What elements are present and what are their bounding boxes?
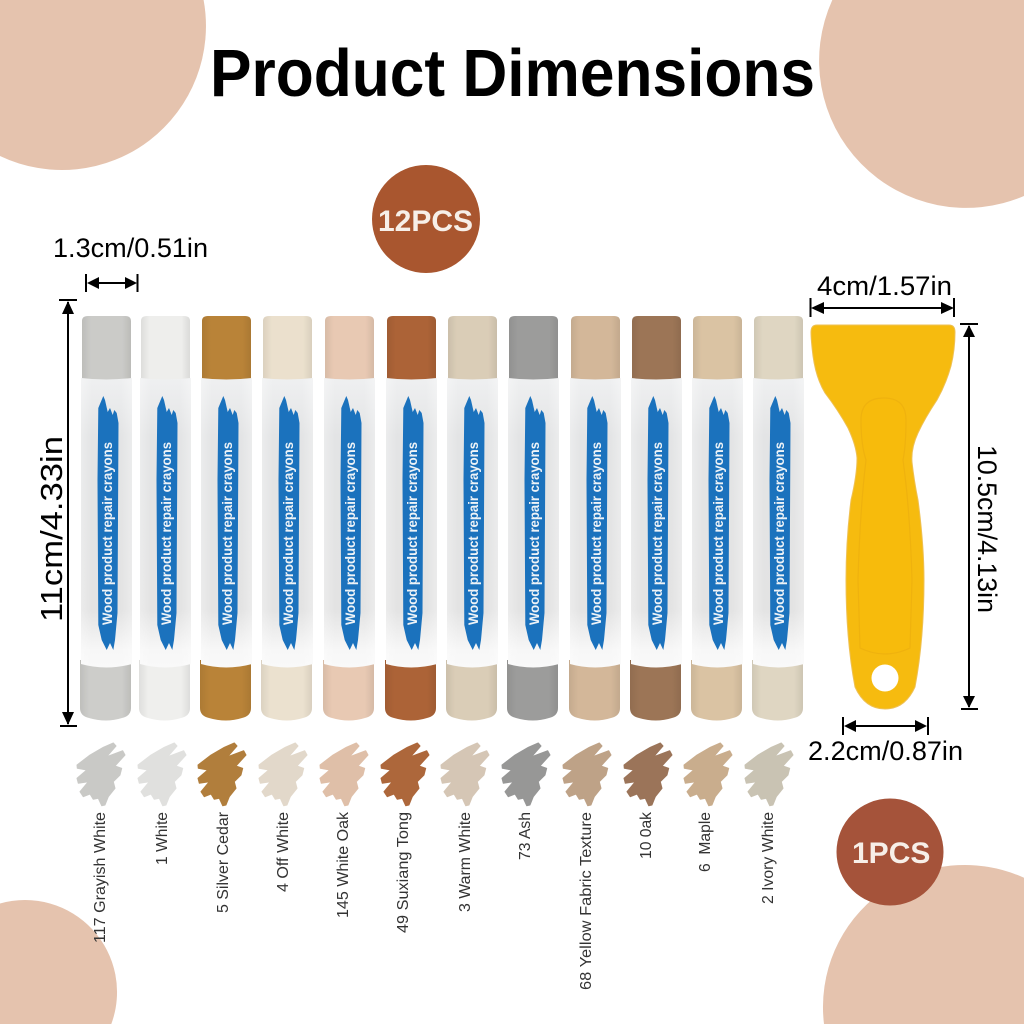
dimension: crayon height: 11cm/4.33in <box>34 436 69 622</box>
swatch: 68 Yellow Fabric Texture <box>563 743 611 806</box>
badge: 12PCS: 12PCS <box>378 205 473 238</box>
dimension: crayon width <box>53 233 208 292</box>
dimension: crayon width: 1.3cm/0.51in <box>53 233 208 263</box>
swatch: 5 Silver Cedar <box>198 743 246 806</box>
crayon: 3 Warm White <box>446 316 498 720</box>
dimension: scraper height <box>960 324 1002 709</box>
dimension: scraper handle width: 2.2cm/0.87in <box>808 736 963 766</box>
label: 68 Yellow Fabric Texture: 68 Yellow Fabric Texture <box>578 812 595 990</box>
scraper tool <box>811 325 955 709</box>
swatch: 2 Ivory White <box>745 743 793 806</box>
swatch: 117 Grayish White <box>77 743 125 806</box>
crayon: 5 Silver Cedar: Wood product repair crayons <box>220 442 235 625</box>
label: 6 Maple: 6 Maple <box>697 812 714 872</box>
crayon: 145 White Oak <box>323 316 375 720</box>
crayon: 4 Off White <box>261 316 313 720</box>
crayon: 68 Yellow Fabric Texture <box>569 316 621 720</box>
dimension: scraper handle width <box>808 717 963 766</box>
label: 10 0ak: 10 0ak <box>638 811 655 859</box>
label: 2 Ivory White: 2 Ivory White <box>760 812 777 904</box>
badge: 12PCS <box>372 165 480 273</box>
label: 3 Warm White: 3 Warm White <box>457 812 474 912</box>
crayon row: 12 crayons <box>80 316 804 720</box>
crayon: 68 Yellow Fabric Texture: Wood product repair crayons <box>589 442 604 625</box>
decorative circle: bottom right <box>823 865 1024 1024</box>
badge: 1PCS <box>836 798 944 906</box>
swatch: 1 White <box>138 743 186 806</box>
dimension: scraper height: 10.5cm/4.13in <box>972 445 1002 613</box>
swatch: 73 Ash <box>502 743 550 806</box>
crayon: 3 Warm White: Wood product repair crayons <box>466 442 481 625</box>
colour name labels <box>92 811 777 990</box>
crayon: 145 White Oak: Wood product repair crayons <box>343 442 358 625</box>
label: 4 Off White: 4 Off White <box>275 812 292 892</box>
crayon: 10 Oak: Wood product repair crayons <box>650 442 665 625</box>
swatch: 10 Oak <box>624 743 672 806</box>
label: 117 Grayish White: 117 Grayish White <box>92 812 109 943</box>
decorative circle: top left <box>0 0 206 170</box>
dimension: scraper head width: 4cm/1.57in <box>817 271 952 301</box>
label: 5 Silver Cedar: 5 Silver Cedar <box>215 811 232 913</box>
crayon: 73 Ash: Wood product repair crayons <box>527 442 542 625</box>
crayon: 73 Ash <box>507 316 559 720</box>
swatch: 3 Warm White <box>441 743 489 806</box>
label: 73 Ash: 73 Ash <box>517 812 534 860</box>
crayon: 2 Ivory White: Wood product repair crayons <box>772 442 787 625</box>
crayon: 117 Grayish White: Wood product repair crayons <box>100 442 115 625</box>
crayon: 117 Grayish White <box>80 316 132 720</box>
crayon: 6 Maple <box>691 316 743 720</box>
dimension: scraper head width <box>810 271 954 317</box>
label: 1 White: 1 White <box>154 812 171 865</box>
swatch: 4 Off White <box>259 743 307 806</box>
crayon: 5 Silver Cedar <box>200 316 252 720</box>
crayon: 2 Ivory White <box>752 316 804 720</box>
swatch: 145 White Oak <box>320 743 368 806</box>
decorative circle: top right <box>819 0 1024 208</box>
crayon: 1 White <box>139 316 191 720</box>
crayon: 49 Suxiang Tong <box>385 316 437 720</box>
label: 49 Suxiang Tong: 49 Suxiang Tong <box>395 812 412 933</box>
swatch: 6 Maple <box>684 743 732 806</box>
title: Product Dimensions <box>210 36 815 111</box>
crayon: 4 Off White: Wood product repair crayons <box>281 442 296 625</box>
label: 145 White Oak: 145 White Oak <box>335 811 352 918</box>
dimension: crayon height <box>34 300 77 726</box>
badge: 1PCS: 1PCS <box>852 837 930 870</box>
crayon: 1 White: Wood product repair crayons <box>159 442 174 625</box>
crayon: 6 Maple: Wood product repair crayons <box>711 442 726 625</box>
crayon: 10 Oak <box>630 316 682 720</box>
colour swatches row <box>77 743 793 806</box>
decorative circle: bottom left <box>0 900 117 1024</box>
swatch: 49 Suxiang Tong <box>381 743 429 806</box>
crayon: 49 Suxiang Tong: Wood product repair crayons <box>405 442 420 625</box>
